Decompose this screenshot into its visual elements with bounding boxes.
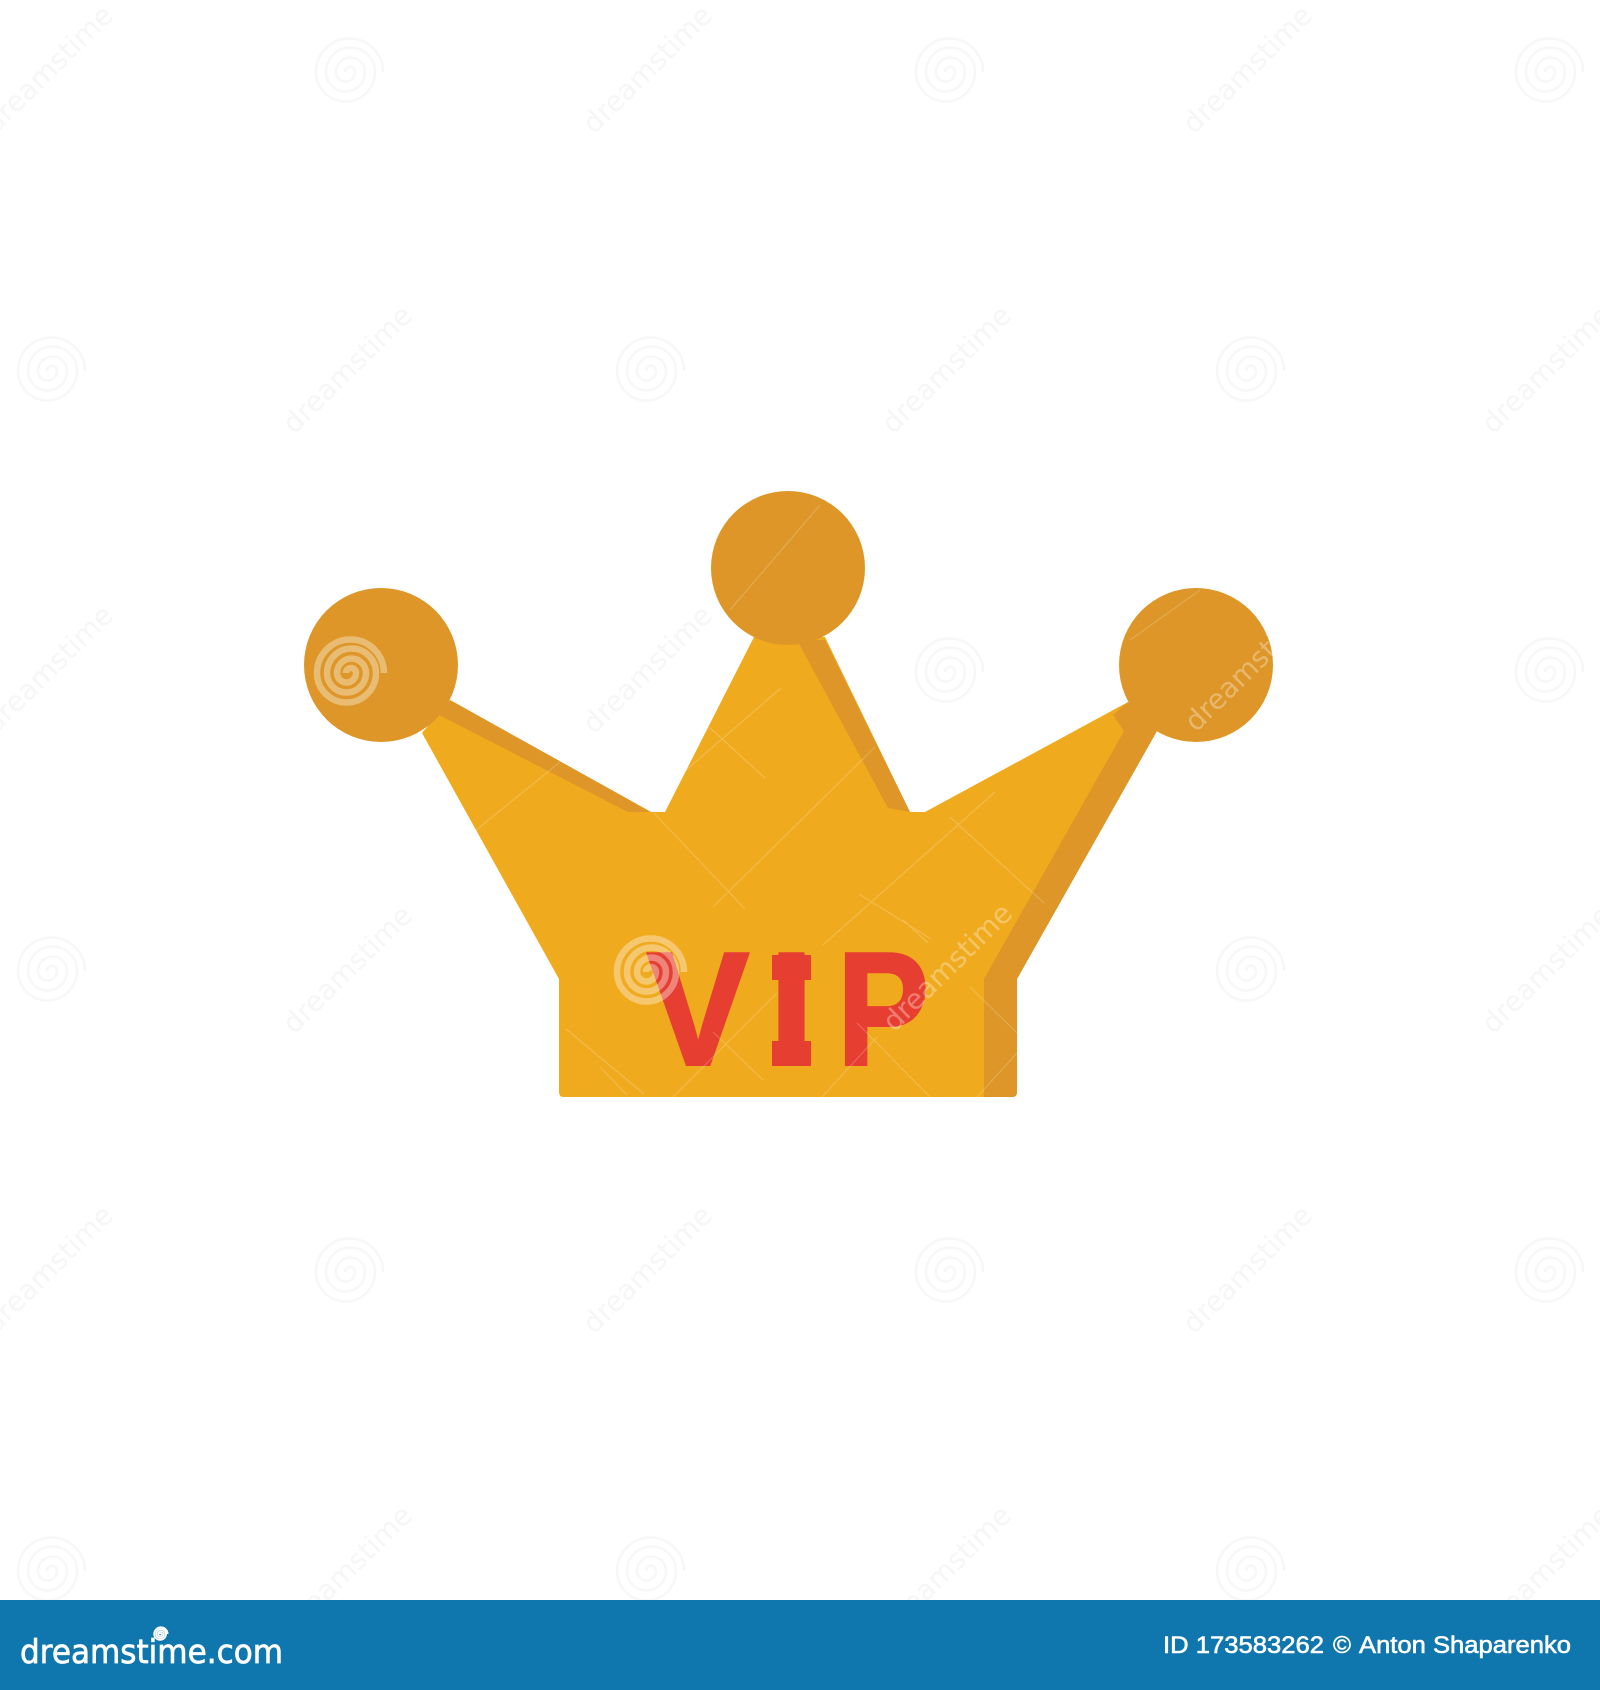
image credit: © — [1333, 1632, 1351, 1659]
watermark overlay on crown: dreamstime — [876, 897, 1019, 1038]
dreamstime logo: dreamstime.com — [20, 1632, 283, 1671]
watermark pattern: dreamstime — [276, 899, 419, 1040]
watermark pattern: dreamstime — [875, 1499, 1018, 1640]
left spike shading — [439, 700, 651, 812]
VIP label: P — [837, 920, 929, 1100]
watermark pattern: dreamstime — [276, 299, 419, 440]
watermark pattern: dreamstime — [576, 0, 719, 140]
watermark pattern: dreamstime — [875, 299, 1018, 440]
watermark pattern: dreamstime — [276, 1499, 419, 1640]
watermark overlay on crown: dreamstime — [576, 599, 719, 740]
left ball — [304, 588, 458, 742]
watermark pattern: dreamstime — [576, 1199, 719, 1340]
image credit: ID 173583262 — [1163, 1632, 1324, 1659]
watermark pattern: dreamstime — [1176, 1199, 1319, 1340]
right side shading — [984, 702, 1157, 1097]
footer bar — [0, 1600, 1600, 1690]
crown body — [422, 637, 1157, 1097]
VIP label: V — [647, 920, 749, 1100]
watermark pattern: dreamstime — [1176, 0, 1319, 140]
watermark overlay on crown: dreamstime — [1178, 597, 1321, 738]
centre ball — [711, 491, 865, 645]
watermark overlay on crown — [317, 505, 1321, 1097]
image credit — [1163, 1632, 1571, 1659]
icon: VIP crown — [304, 491, 1273, 1100]
watermark pattern: dreamstime — [576, 599, 719, 740]
VIP label: I — [769, 920, 814, 1100]
VIP label — [647, 920, 929, 1100]
image credit: Anton Shaparenko — [1359, 1632, 1571, 1659]
right ball — [1119, 588, 1273, 742]
centre spike shading — [797, 640, 910, 812]
